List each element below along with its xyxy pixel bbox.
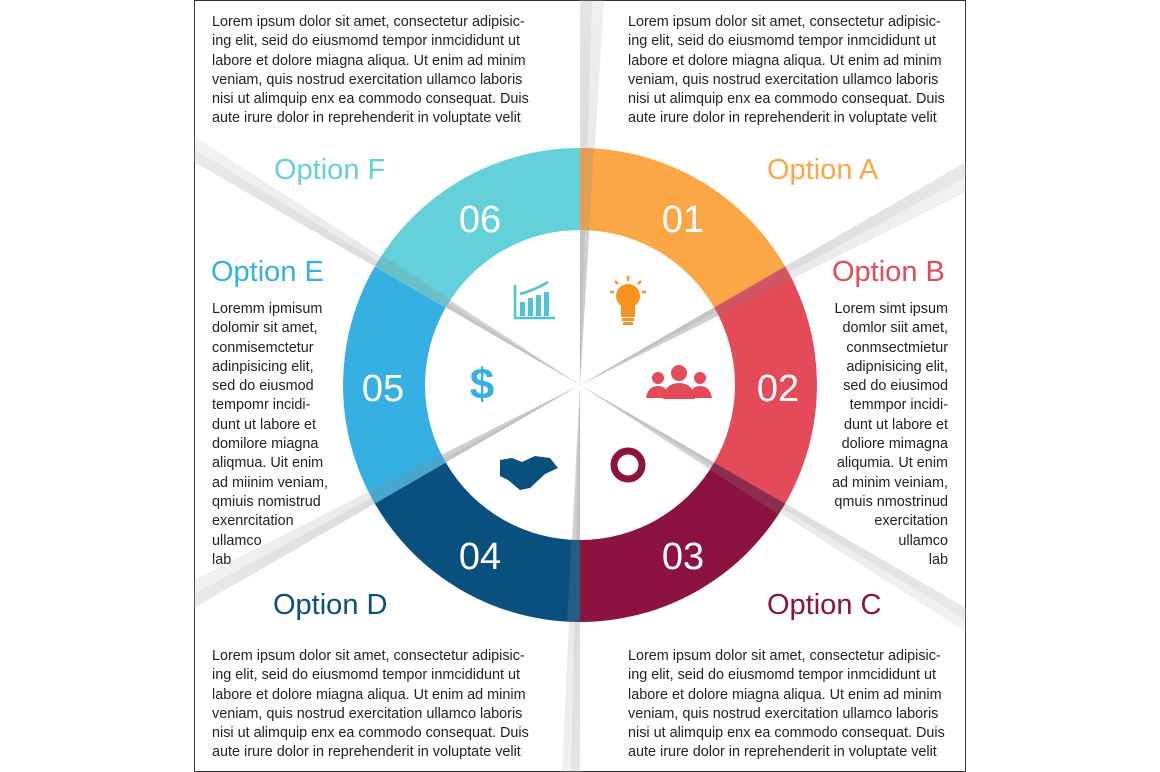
text: top left: ing elit, seid do eiusmomd tempor inmcididunt ut bbox=[212, 33, 520, 49]
text: left side: ad miinim veniam, bbox=[212, 475, 328, 491]
text: bottom left: aute irure dolor in reprehenderit in voluptate velit bbox=[212, 744, 521, 760]
text: top left: nisi ut alimquip enx ea commodo consequat. Duis bbox=[212, 91, 529, 107]
text: right side: doliore mimagna bbox=[842, 436, 948, 452]
text: top left: labore et dolore miagna aliqua. Ut enim ad minim bbox=[212, 53, 526, 69]
text: bottom right: veniam, quis nostrud exercitation ullamco laboris bbox=[628, 706, 938, 722]
text: right side: temmpor incidi- bbox=[850, 397, 948, 413]
text: left side: lab bbox=[212, 552, 231, 568]
text: top right: nisi ut alimquip enx ea commodo consequat. Duis bbox=[628, 91, 945, 107]
text: top right: veniam, quis nostrud exercitation ullamco laboris bbox=[628, 72, 938, 88]
ring segments bbox=[343, 148, 817, 622]
text: top right: ing elit, seid do eiusmomd tempor inmcididunt ut bbox=[628, 33, 936, 49]
text: bottom left: labore et dolore miagna aliqua. Ut enim ad minim bbox=[212, 687, 526, 703]
title: Option D: Option D bbox=[273, 589, 387, 621]
text: bottom right bbox=[628, 648, 945, 760]
icon: dollar: $ bbox=[470, 360, 494, 409]
text: bottom right: aute irure dolor in reprehenderit in voluptate velit bbox=[628, 744, 937, 760]
text: bottom left: Lorem ipsum dolor sit amet, consectetur adipisic- bbox=[212, 648, 525, 664]
title: Option C: Option C bbox=[767, 589, 881, 621]
text: right side: conmsectmietur bbox=[846, 340, 948, 356]
icon: chart bbox=[515, 282, 555, 318]
text: top right: aute irure dolor in reprehenderit in voluptate velit bbox=[628, 110, 937, 126]
text: left side: qmiuis nomistrud bbox=[212, 494, 321, 510]
text: left side: Loremm ipmisum bbox=[212, 301, 322, 317]
numbers: 05 bbox=[362, 368, 404, 410]
icon: bulb bbox=[610, 276, 646, 325]
text: top right: labore et dolore miagna aliqua. Ut enim ad minim bbox=[628, 53, 942, 69]
text: right side: adipnisicing elit, bbox=[846, 359, 948, 375]
title: Option B: Option B bbox=[832, 256, 945, 288]
frame bbox=[194, 0, 966, 772]
text: right side: sed do eiusimod bbox=[843, 378, 948, 394]
icon: cycle bbox=[614, 451, 642, 479]
text: top left bbox=[212, 14, 529, 126]
text: top right: Lorem ipsum dolor sit amet, consectetur adipisic- bbox=[628, 14, 941, 30]
text: bottom right: labore et dolore miagna aliqua. Ut enim ad minim bbox=[628, 687, 942, 703]
text: right side: ad minim veiniam, bbox=[832, 475, 948, 491]
text: left side: exenrcitation bbox=[212, 513, 294, 529]
numbers: 01 bbox=[662, 199, 704, 241]
text: left side bbox=[212, 301, 328, 568]
text: bottom right: Lorem ipsum dolor sit amet, consectetur adipisic- bbox=[628, 648, 941, 664]
text: bottom right: nisi ut alimquip enx ea commodo consequat. Duis bbox=[628, 725, 945, 741]
text: bottom left: veniam, quis nostrud exercitation ullamco laboris bbox=[212, 706, 522, 722]
text: right side: dunt ut labore et bbox=[844, 417, 948, 433]
text: left side: domilore miagna bbox=[212, 436, 318, 452]
text: left side: dolomir sit amet, bbox=[212, 320, 318, 336]
text: left side: ullamco bbox=[212, 533, 262, 549]
text: right side: lab bbox=[929, 552, 948, 568]
text: right side: aliqumia. Ut enim bbox=[837, 455, 948, 471]
text: left side: tempomr incidi- bbox=[212, 397, 310, 413]
text: right side: ullamco bbox=[898, 533, 948, 549]
text: right side: Lorem simt ipsum bbox=[834, 301, 948, 317]
numbers: 02 bbox=[757, 368, 799, 410]
text: left side: aliqmua. Uit enim bbox=[212, 455, 323, 471]
title: Option E: Option E bbox=[211, 256, 324, 288]
text: right side bbox=[832, 301, 948, 568]
title: Option A: Option A bbox=[767, 154, 878, 186]
text: right side: exercitation bbox=[874, 513, 948, 529]
numbers: 04 bbox=[459, 536, 501, 578]
text: left side: dunt ut labore et bbox=[212, 417, 316, 433]
text: left side: adinpisicing elit, bbox=[212, 359, 314, 375]
text: top right bbox=[628, 14, 945, 126]
text: right side: qmuis nmostrinud bbox=[834, 494, 948, 510]
text: bottom left: ing elit, seid do eiusmomd tempor inmcididunt ut bbox=[212, 667, 520, 683]
numbers: 03 bbox=[662, 536, 704, 578]
icon: handshake bbox=[500, 456, 558, 490]
text: top left: veniam, quis nostrud exercitation ullamco laboris bbox=[212, 72, 522, 88]
icon: people bbox=[646, 365, 712, 399]
inner fold shading bbox=[369, 148, 791, 622]
text: top left: Lorem ipsum dolor sit amet, consectetur adipisic- bbox=[212, 14, 525, 30]
text: bottom left: nisi ut alimquip enx ea commodo consequat. Duis bbox=[212, 725, 529, 741]
numbers: 06 bbox=[459, 199, 501, 241]
title: Option F: Option F bbox=[274, 154, 385, 186]
text: top left: aute irure dolor in reprehenderit in voluptate velit bbox=[212, 110, 521, 126]
numbers bbox=[362, 199, 799, 578]
text: left side: sed do eiusmod bbox=[212, 378, 314, 394]
text: bottom left bbox=[212, 648, 529, 760]
text: bottom right: ing elit, seid do eiusmomd tempor inmcididunt ut bbox=[628, 667, 936, 683]
text: right side: domlor siit amet, bbox=[842, 320, 948, 336]
fold shadows bbox=[194, 0, 966, 772]
text: left side: conmisemctetur bbox=[212, 340, 314, 356]
